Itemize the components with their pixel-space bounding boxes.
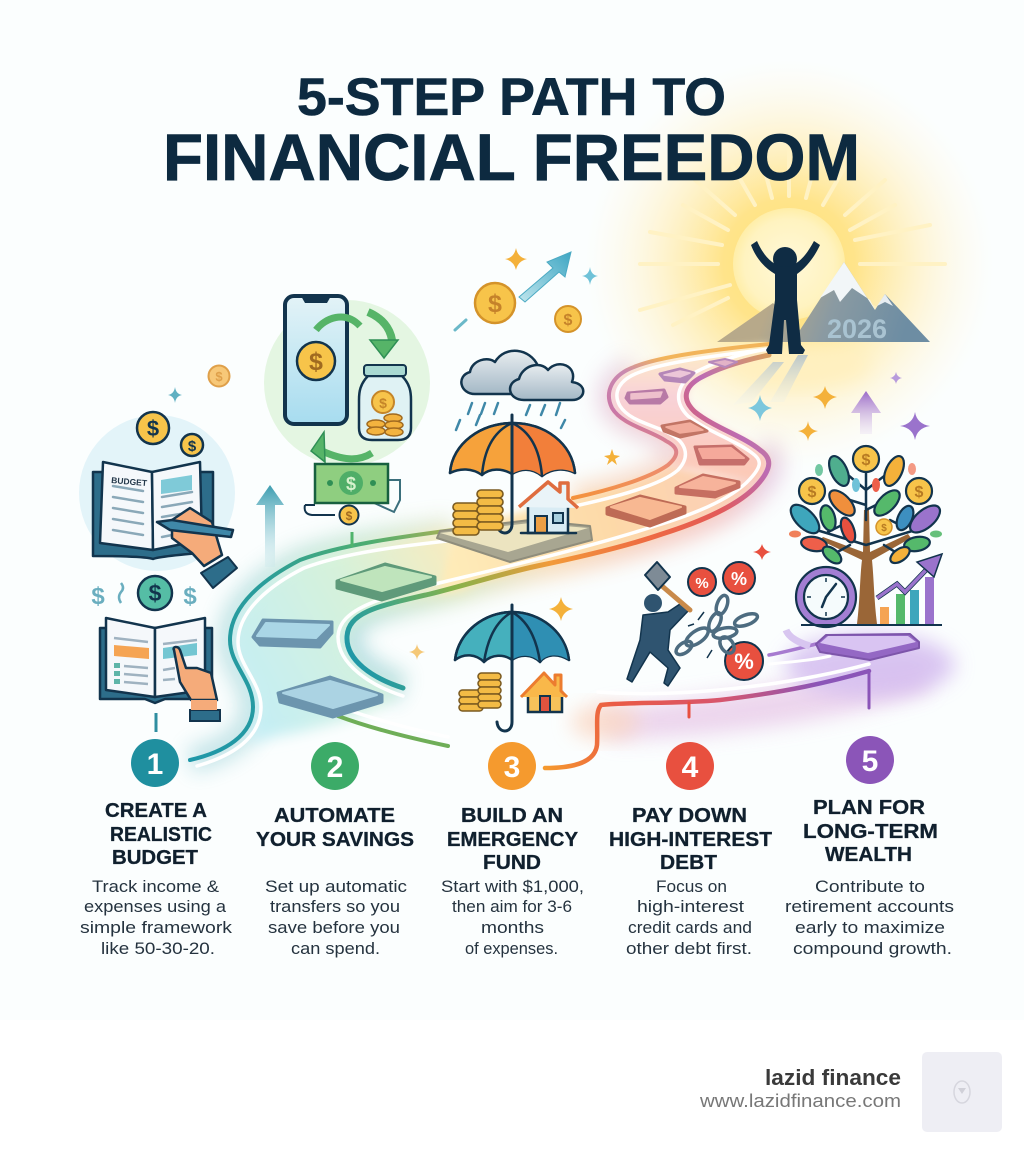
step 3 badge [488, 742, 536, 790]
step 2 text: transfers so you [270, 898, 400, 916]
step 3 text: BUILD AN [461, 805, 563, 827]
footer brand text: www.lazidfinance.com [699, 1090, 901, 1111]
step 2 text [256, 805, 414, 958]
step 2 badge: 2 [327, 751, 343, 784]
step 2 badge [311, 742, 359, 790]
step 5 text: PLAN FOR [813, 797, 926, 819]
panel: pay down debt person and chains: % [695, 575, 709, 592]
step 1 badge: 1 [147, 748, 163, 781]
panel: money tree, clock and chart: $ [881, 523, 887, 534]
panel: automate savings phone and jar: $ [309, 348, 323, 376]
figure with raised arms [733, 241, 820, 405]
panel: money tree, clock and chart [786, 446, 945, 660]
footer brand text: lazid finance [765, 1065, 901, 1090]
step 1 text: CREATE A [105, 800, 207, 822]
panel: pay down debt person and chains: % [734, 649, 754, 674]
step 1 text: simple framework [80, 919, 233, 937]
step 1 text: BUDGET [112, 847, 198, 869]
panel: emergency fund teal umbrella and house [409, 597, 573, 731]
panel: create a budget book: $ [188, 438, 197, 455]
panel: automate savings phone and jar: $ [346, 474, 356, 494]
panel: create a budget book [79, 412, 235, 571]
road glow [190, 344, 955, 760]
step 5 badge: 5 [862, 745, 878, 778]
step 5 text: LONG-TERM [803, 821, 938, 843]
step 3 text: FUND [483, 852, 541, 874]
step 2 text: YOUR SAVINGS [256, 829, 414, 851]
panel: create a budget book: $ [147, 416, 159, 441]
stepping stones [253, 359, 748, 717]
step 5 text: WEALTH [825, 844, 912, 866]
step 5 text: early to maximize [795, 919, 945, 937]
step 4 text: high-interest [637, 898, 744, 916]
panel: automate savings phone and jar: $ [346, 509, 353, 523]
panel: automate savings phone and jar: $ [379, 395, 387, 411]
panel: money tree, clock and chart: $ [915, 484, 924, 501]
step 5 text [785, 797, 954, 958]
step 5 badge [846, 736, 894, 784]
panel: coin and dollar signs: $ [183, 583, 197, 610]
step 2 text: AUTOMATE [274, 805, 395, 827]
step 4 badge: 4 [682, 751, 699, 784]
step 1 text: like 50-30-20. [101, 940, 215, 958]
title: FINANCIAL FREEDOM [163, 120, 860, 194]
step 4 text: other debt first. [626, 940, 752, 958]
icon: teal up arrow [256, 485, 284, 567]
step 4 text: PAY DOWN [632, 805, 747, 827]
icon: coin and sparkle: $ [215, 369, 223, 384]
mountains with 2026: 2026 [827, 314, 887, 344]
icon: coins with rising arrow: $ [564, 312, 573, 329]
step 5 text: Contribute to [815, 878, 925, 896]
step 1 text: expenses using a [84, 898, 227, 916]
step 1 badge [131, 739, 179, 787]
panel: second open book with pointing hand [100, 618, 220, 732]
step 1 text: REALISTIC [110, 824, 212, 846]
step 3 text [441, 805, 584, 958]
icon: coins with rising arrow: $ [488, 290, 502, 318]
step 3 text: of expenses. [465, 940, 558, 958]
step 3 text: then aim for 3-6 [452, 898, 572, 916]
path: upper edge [190, 344, 769, 766]
panel: money tree, clock and chart: $ [808, 484, 817, 501]
step 4 text [609, 805, 772, 958]
title: 5-STEP PATH TO [297, 68, 726, 127]
panel: pay down debt person and chains [627, 544, 771, 686]
panel: pay down debt person and chains: % [731, 569, 747, 589]
path: lower edge [338, 349, 769, 746]
panel: coin and dollar signs: $ [91, 583, 105, 610]
footer brand text [699, 1065, 901, 1111]
path: lower road to step 5 [545, 644, 869, 768]
icon: purple growth arrow [851, 391, 881, 434]
step 4 text: Focus on [656, 878, 727, 896]
step 4 badge [666, 742, 714, 790]
step 5 text: compound growth. [793, 940, 952, 958]
panel: automate savings phone and jar [264, 296, 430, 547]
title [163, 68, 860, 194]
step 2 text: Set up automatic [265, 878, 407, 896]
step 1 text: Track income & [92, 878, 219, 896]
step 2 text: save before you [268, 919, 400, 937]
mountains with 2026 [717, 262, 930, 344]
step 2 text: can spend. [291, 940, 380, 958]
sparkles near sun [604, 372, 930, 465]
icon: coin and sparkle [168, 366, 230, 403]
step 3 text: months [481, 919, 544, 937]
sun and glow [584, 59, 994, 469]
panel: coin and dollar signs: $ [149, 580, 162, 606]
panel: money tree, clock and chart: $ [862, 452, 871, 469]
icon: coins with rising arrow [455, 248, 598, 332]
step 3 badge: 3 [504, 751, 520, 784]
footer logo box [922, 1052, 1002, 1132]
step 3 text: Start with $1,000, [441, 878, 584, 896]
panel: coin and dollar signs [91, 576, 197, 610]
step 5 text: retirement accounts [785, 898, 954, 916]
step 4 text: credit cards and [628, 919, 752, 937]
panel: emergency fund umbrella, clouds and house [437, 351, 592, 562]
step 1 text [80, 800, 233, 958]
step 3 text: EMERGENCY [447, 829, 579, 851]
step 4 text: DEBT [660, 852, 717, 874]
panel: create a budget book: BUDGET [111, 475, 148, 488]
step 4 text: HIGH-INTEREST [609, 829, 772, 851]
icon: writing hand [157, 508, 237, 588]
